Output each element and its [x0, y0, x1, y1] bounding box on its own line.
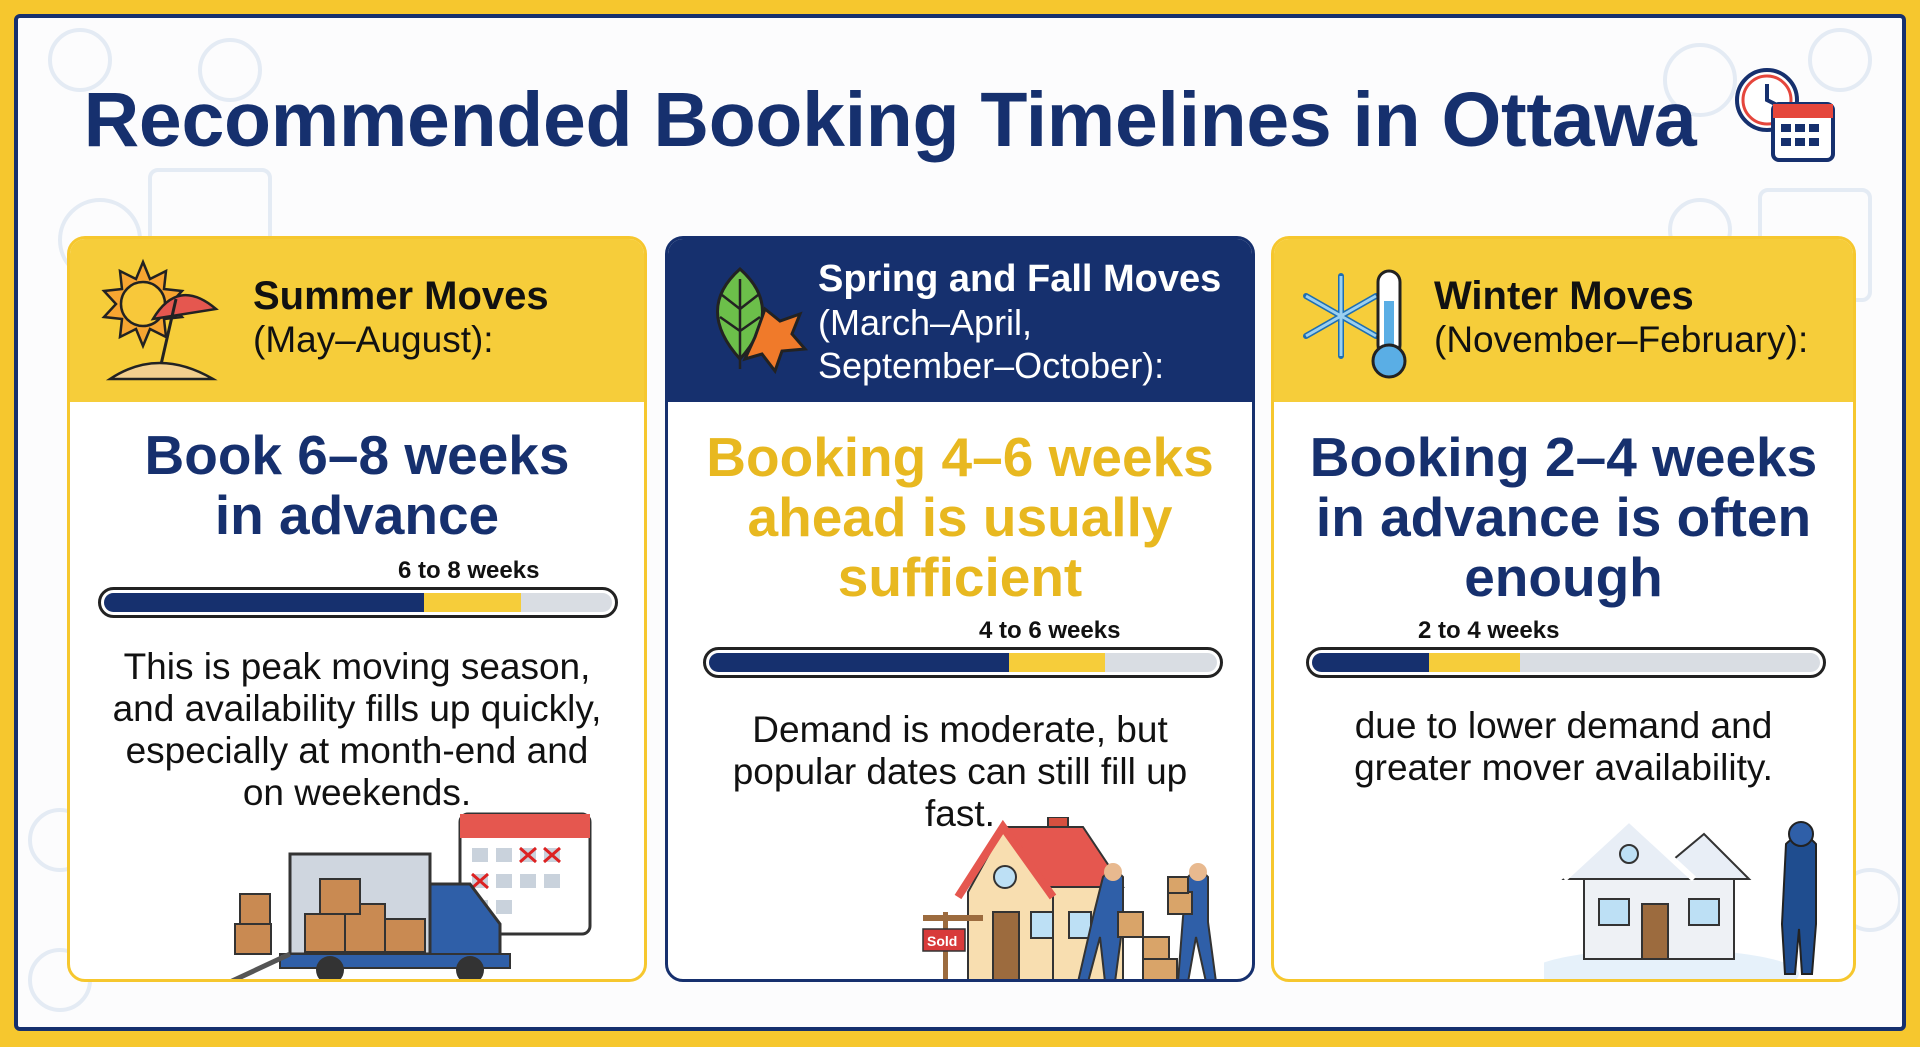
description: This is peak moving season, — [124, 646, 590, 687]
icon: clock and calendar — [1735, 68, 1835, 162]
description: popular dates can still fill up — [733, 751, 1187, 792]
progress label: 6 to 8 weeks — [398, 557, 539, 584]
description: on weekends. — [243, 772, 471, 813]
headline — [706, 426, 1214, 608]
headline — [145, 424, 569, 546]
header text: (May–August): — [253, 319, 494, 360]
progress bar — [703, 647, 1223, 678]
header text: (November–February): — [1434, 319, 1808, 360]
description — [1354, 705, 1773, 788]
headline — [1310, 426, 1817, 608]
description: fast. — [925, 793, 995, 834]
headline: Book 6–8 weeks — [145, 424, 569, 486]
header text — [818, 258, 1221, 386]
panel header: winter — [1274, 239, 1853, 402]
headline: in advance — [215, 484, 499, 546]
illustration: snowy house and person — [1544, 821, 1817, 979]
illustration: house and movers: Sold — [927, 933, 957, 949]
header text: (March–April, — [818, 302, 1032, 343]
title: Recommended Booking Timelines in Ottawa — [84, 77, 1696, 163]
description: Demand is moderate, but — [752, 709, 1168, 750]
header text — [1434, 274, 1808, 360]
headline: in advance is often — [1316, 486, 1811, 548]
progress bar — [98, 587, 618, 618]
headline: enough — [1464, 546, 1663, 608]
panel header: spring and fall — [668, 239, 1252, 402]
headline: sufficient — [838, 546, 1082, 608]
icon: leaves — [716, 267, 808, 374]
headline: Booking 2–4 weeks — [1310, 426, 1817, 488]
headline: Booking 4–6 weeks — [706, 426, 1214, 488]
description — [733, 709, 1187, 834]
panel header: summer — [70, 239, 644, 402]
icon: snowflake and thermometer — [1303, 270, 1406, 378]
panel: spring and fall moves — [665, 236, 1255, 982]
description: especially at month-end and — [126, 730, 588, 771]
header text: Spring and Fall Moves — [818, 258, 1221, 300]
panel: summer moves — [67, 236, 647, 982]
panel: winter moves — [1271, 236, 1856, 982]
description: and availability fills up quickly, — [113, 688, 601, 729]
progress label: 2 to 4 weeks — [1418, 617, 1559, 644]
header text — [253, 274, 549, 360]
progress bar — [1306, 647, 1826, 678]
headline: ahead is usually — [748, 486, 1172, 548]
description: due to lower demand and — [1355, 705, 1772, 746]
header text: September–October): — [818, 345, 1164, 386]
progress label: 4 to 6 weeks — [979, 617, 1120, 644]
illustration: truck and calendar — [230, 812, 592, 979]
description — [113, 646, 601, 813]
icon: sun and umbrella — [102, 258, 219, 380]
illustration: house and movers — [922, 817, 1217, 979]
header text: Winter Moves — [1434, 274, 1694, 318]
description: greater mover availability. — [1354, 747, 1773, 788]
header text: Summer Moves — [253, 274, 549, 318]
